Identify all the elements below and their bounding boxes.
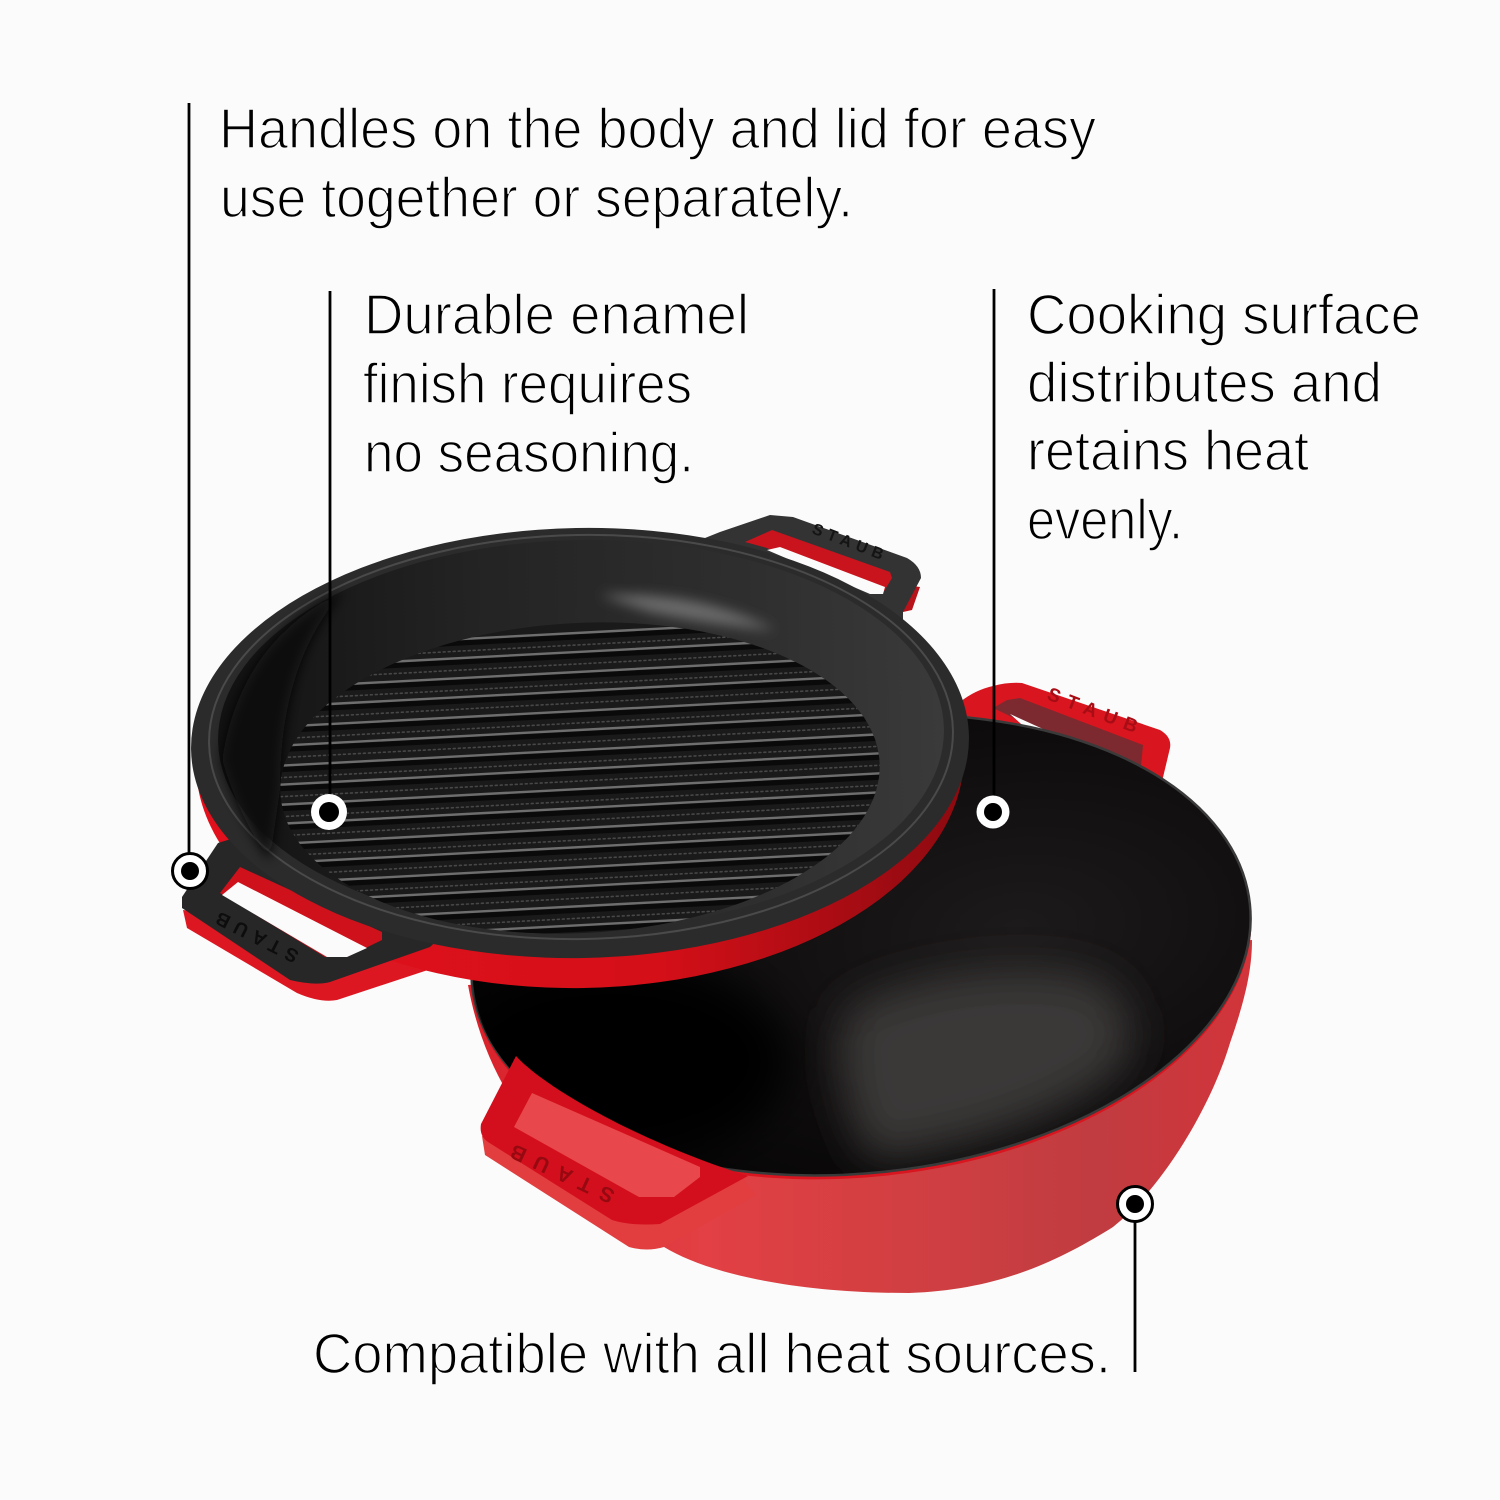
- text: Compatible with all heat sources.: [313, 1322, 1111, 1386]
- text: use together or separately.: [220, 166, 853, 230]
- text: [363, 283, 749, 485]
- cookware illustration: [182, 515, 1275, 1293]
- lid handle right: [700, 515, 921, 640]
- text: [219, 97, 1096, 230]
- lid red underside: [192, 525, 968, 995]
- pot back handle: [960, 683, 1170, 790]
- lid left handle red underside: [183, 910, 440, 1001]
- leader line: [329, 291, 331, 797]
- text: Durable enamel: [364, 283, 749, 347]
- grill ridge highlights: [280, 626, 880, 930]
- text: retains heat: [1027, 419, 1309, 483]
- callout: heat sources: [313, 1186, 1152, 1386]
- marker: [172, 854, 208, 888]
- marker: [311, 794, 347, 830]
- pot interior: [470, 716, 1252, 1177]
- pot red body: [468, 940, 1252, 1293]
- leader line: [1134, 1220, 1136, 1372]
- pot back handle: STAUB: [1044, 684, 1140, 738]
- callout: cooking surface: [976, 283, 1421, 828]
- well highlight: [600, 594, 775, 630]
- grill lid: [182, 515, 973, 1001]
- pot: base: [447, 677, 1275, 1293]
- pot front handle: STAUB: [507, 1139, 618, 1207]
- text: evenly.: [1027, 488, 1183, 552]
- text: [1027, 283, 1421, 552]
- lid inner well: [215, 534, 947, 936]
- callout: handles: [172, 97, 1096, 888]
- leader line: [188, 103, 190, 855]
- grill surface with ridges: [280, 622, 880, 934]
- lid handle left: [182, 830, 480, 984]
- lid handle right: STAUB: [810, 521, 886, 564]
- grill ridge shadows: [280, 629, 880, 934]
- text: Cooking surface: [1027, 283, 1421, 347]
- leader line: [993, 289, 995, 797]
- text: finish requires: [363, 352, 692, 416]
- grill grain: [280, 636, 880, 925]
- lid black rim: [187, 521, 973, 965]
- marker: [1118, 1186, 1152, 1222]
- text: Handles on the body and lid for easy: [219, 97, 1096, 161]
- marker: [976, 796, 1010, 828]
- pot front handle: [481, 1056, 756, 1250]
- lid handle left: STAUB: [213, 907, 302, 966]
- text: no seasoning.: [364, 421, 694, 485]
- text: distributes and: [1027, 351, 1382, 415]
- lid rim ridge: [206, 529, 956, 945]
- pot rim: [447, 677, 1275, 1217]
- well shadow left: [222, 590, 345, 860]
- callout: enamel: [311, 283, 749, 830]
